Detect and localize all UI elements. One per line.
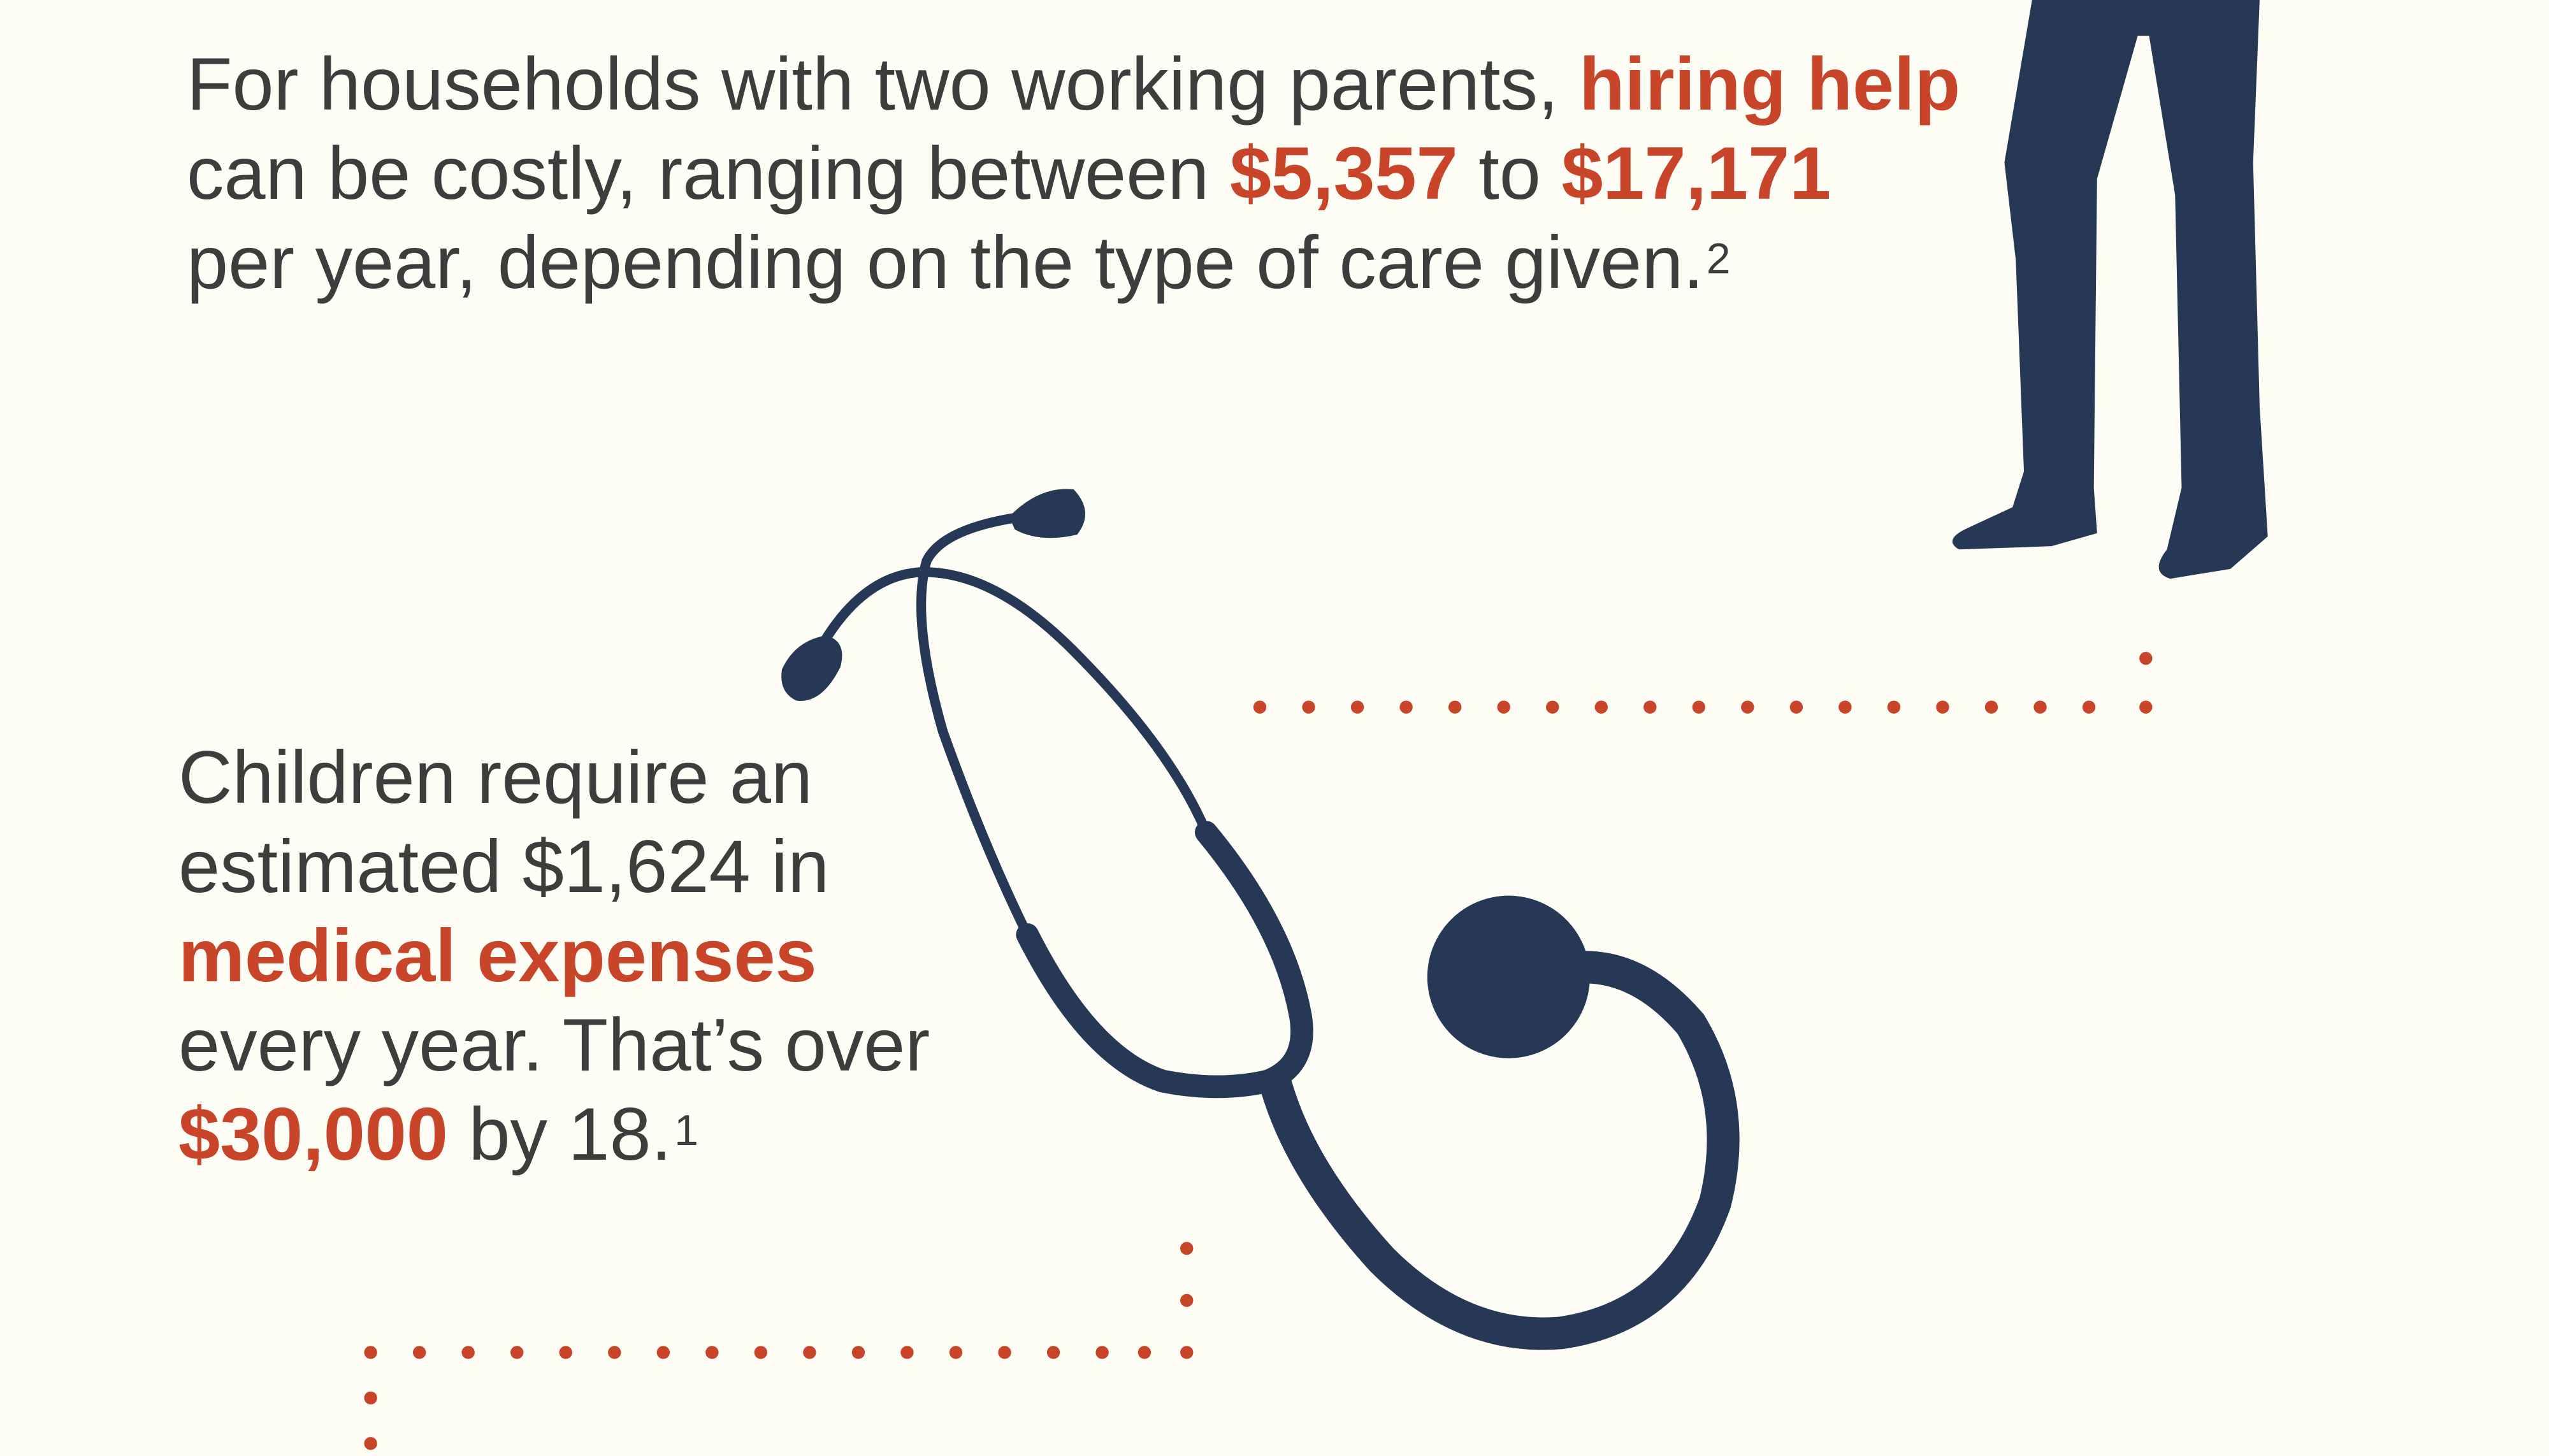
text block: hiring help costs: can be costly, ranging between $5,357 to $17,171 (187, 131, 1831, 215)
dotted connector: bottom (364, 1242, 1193, 1450)
text block: medical expenses: medical expenses (178, 914, 817, 997)
icon: stethoscope (783, 491, 1723, 1334)
text block: hiring help costs: per year, depending on the type of care given.2 (187, 220, 1731, 304)
text block: medical expenses: estimated $1,624 in (178, 825, 829, 908)
text block: medical expenses: every year. That’s over (178, 1003, 930, 1086)
text block: medical expenses (178, 735, 930, 1176)
dotted connector: top (1253, 652, 2153, 714)
text block: medical expenses: Children require an (178, 735, 812, 819)
text block: medical expenses: $30,000 by 18.1 (178, 1092, 698, 1176)
icon: legs silhouette (1953, 0, 2268, 579)
text block: hiring help costs: For households with two working parents, hiring help (187, 42, 1960, 126)
text block: hiring help costs (187, 42, 1960, 304)
